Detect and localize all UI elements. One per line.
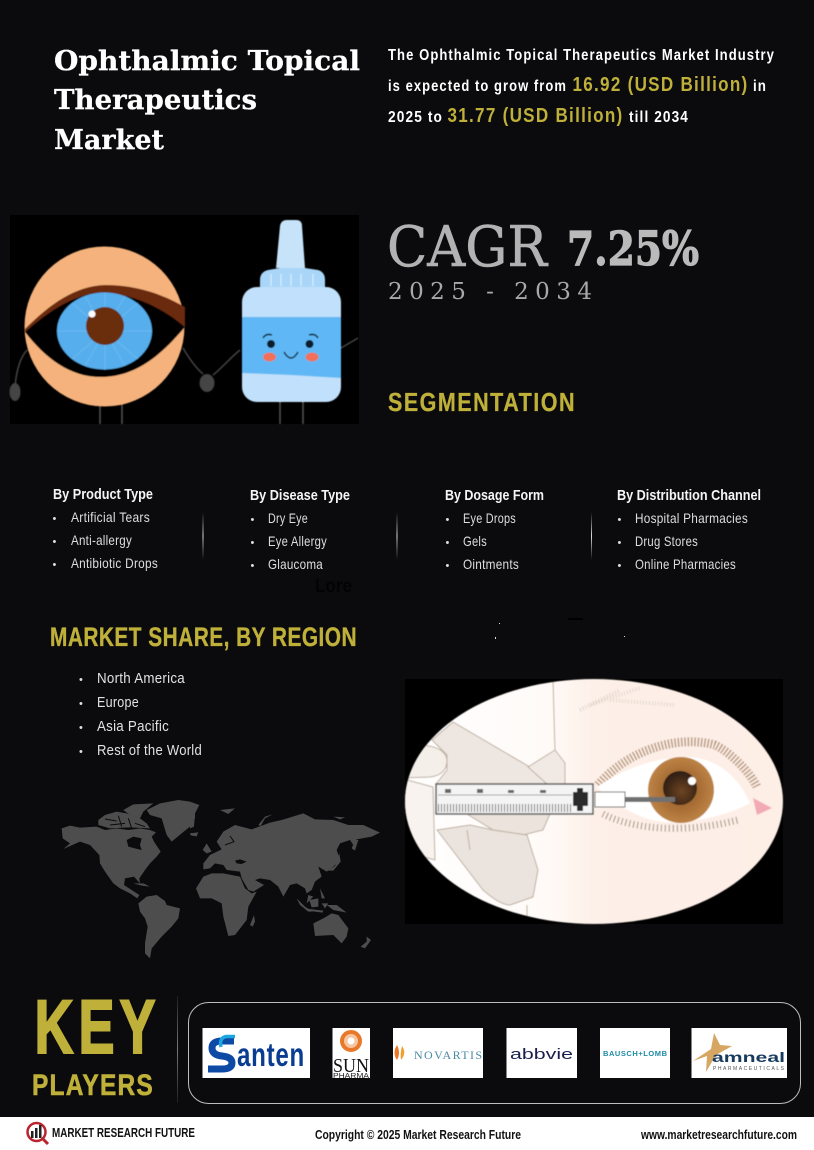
segmentation column: by distribution channel: Hospital Pharmacies — [635, 510, 748, 526]
segmentation column: by product type: Antibiotic Drops — [71, 555, 158, 571]
CAGR figure — [387, 215, 699, 305]
segmentation column: by distribution channel: • — [618, 537, 622, 549]
illustration: eye injection — [400, 679, 783, 924]
segmentation column: by disease type: Dry Eye — [268, 510, 308, 526]
segmentation column: by dosage form: • — [446, 514, 450, 526]
logo: Santen — [202, 1028, 310, 1078]
eye — [597, 757, 750, 822]
hand — [400, 679, 675, 924]
logo: Amneal: PHARMACEUTICALS — [713, 1066, 785, 1072]
segmentation column: by product type: • — [52, 536, 56, 548]
title: Ophthalmic Topical — [54, 45, 360, 77]
segmentation column: by disease type: • — [250, 560, 254, 572]
segmentation column: by disease type: By Disease Type — [250, 487, 350, 504]
title: Therapeutics — [54, 84, 257, 116]
region list: • — [79, 746, 83, 758]
market growth summary: 31.77 (USD Billion) — [448, 105, 624, 127]
key players panel — [188, 1002, 800, 1104]
logo: Sun Pharma: PHARMA — [333, 1071, 369, 1080]
syringe — [436, 784, 675, 814]
segmentation column: by disease type: • — [250, 514, 254, 526]
logo: Santen: anten — [237, 1036, 305, 1073]
logo: AbbVie — [506, 1028, 577, 1078]
region list: • — [79, 674, 83, 686]
logo: Sun Pharma: SUN — [333, 1055, 369, 1077]
segmentation column: by product type: Anti-allergy — [71, 532, 132, 548]
icon: eye-drop bottle — [242, 220, 341, 424]
eyelashes — [598, 742, 757, 828]
heading: segmentation: SEGMENTATION — [388, 387, 576, 417]
key players label: KEY — [34, 985, 160, 1070]
segmentation column: by product type — [52, 486, 158, 571]
CAGR figure: CAGR — [387, 215, 549, 280]
logo: Novartis: NOVARTIS — [414, 1048, 482, 1062]
market growth summary: 2025 to — [388, 109, 443, 126]
world map — [62, 800, 380, 958]
segmentation column: by dosage form: • — [446, 537, 450, 549]
key players label: PLAYERS — [32, 1069, 154, 1102]
segmentation column: by dosage form: By Dosage Form — [445, 487, 544, 504]
title — [54, 45, 360, 156]
region list: Europe — [97, 694, 139, 711]
region list: North America — [97, 670, 185, 687]
logo: Market Research Future — [28, 1123, 195, 1144]
faint stray text: Lore — [315, 576, 352, 597]
segmentation column: by dosage form: • — [446, 560, 450, 572]
region list: Asia Pacific — [97, 718, 169, 735]
logo: Bausch + Lomb: BAUSCH+LOMB — [603, 1049, 668, 1058]
segmentation column: by dosage form — [445, 487, 544, 572]
logo: Novartis — [393, 1028, 483, 1078]
segmentation column: by disease type: Eye Allergy — [268, 533, 327, 549]
illustration: eye and eye-drop bottle — [10, 215, 359, 424]
logo: Market Research Future: MARKET RESEARCH FUTURE — [52, 1125, 195, 1140]
title: Market — [54, 124, 164, 156]
key players label — [32, 985, 160, 1102]
logo: Amneal: amneal — [712, 1049, 785, 1065]
segmentation column: by product type: Artificial Tears — [71, 509, 150, 525]
icon: holding hands — [183, 338, 358, 392]
logo: AbbVie: abbvie — [510, 1046, 573, 1063]
segmentation column: by disease type: • — [250, 537, 254, 549]
logo: Sun Pharma — [332, 1028, 370, 1080]
CAGR figure: 2025 - 2034 — [388, 279, 592, 305]
segmentation column: by product type: By Product Type — [53, 486, 153, 503]
market growth summary: in — [753, 78, 767, 95]
segmentation column: by dosage form: Eye Drops — [463, 510, 516, 526]
logo: Bausch + Lomb — [600, 1028, 670, 1078]
market growth summary — [388, 47, 775, 127]
segmentation column: by product type: • — [52, 559, 56, 571]
segmentation column: by dosage form: Ointments — [463, 556, 519, 572]
segmentation column: by distribution channel: By Distribution Channel — [617, 487, 761, 504]
segmentation column: by disease type — [250, 487, 350, 572]
footer — [0, 1117, 814, 1150]
market growth summary: 16.92 (USD Billion) — [572, 74, 748, 96]
segmentation column: by product type: • — [52, 513, 56, 525]
segmentation column: by distribution channel: Drug Stores — [635, 533, 698, 549]
icon: eye character — [10, 246, 185, 424]
market growth summary: till 2034 — [629, 109, 689, 126]
region list: Rest of the World — [97, 742, 202, 759]
segmentation column: by distribution channel — [617, 487, 761, 572]
market growth summary: is expected to grow from — [388, 78, 567, 95]
CAGR figure: 7.25% — [567, 221, 699, 276]
segmentation column: by distribution channel: Online Pharmacies — [635, 556, 736, 572]
segmentation column: by distribution channel: • — [618, 514, 622, 526]
segmentation column: by disease type: Glaucoma — [268, 556, 323, 572]
region list — [79, 670, 202, 759]
heading: market share by region: MARKET SHARE, BY REGION — [50, 622, 357, 652]
copyright: Copyright © 2025 Market Research Future — [315, 1127, 521, 1142]
segmentation column: by distribution channel: • — [618, 560, 622, 572]
region list: • — [79, 722, 83, 734]
segmentation column: by dosage form: Gels — [463, 533, 487, 549]
logo: Amneal — [692, 1028, 787, 1078]
region list: • — [79, 698, 83, 710]
